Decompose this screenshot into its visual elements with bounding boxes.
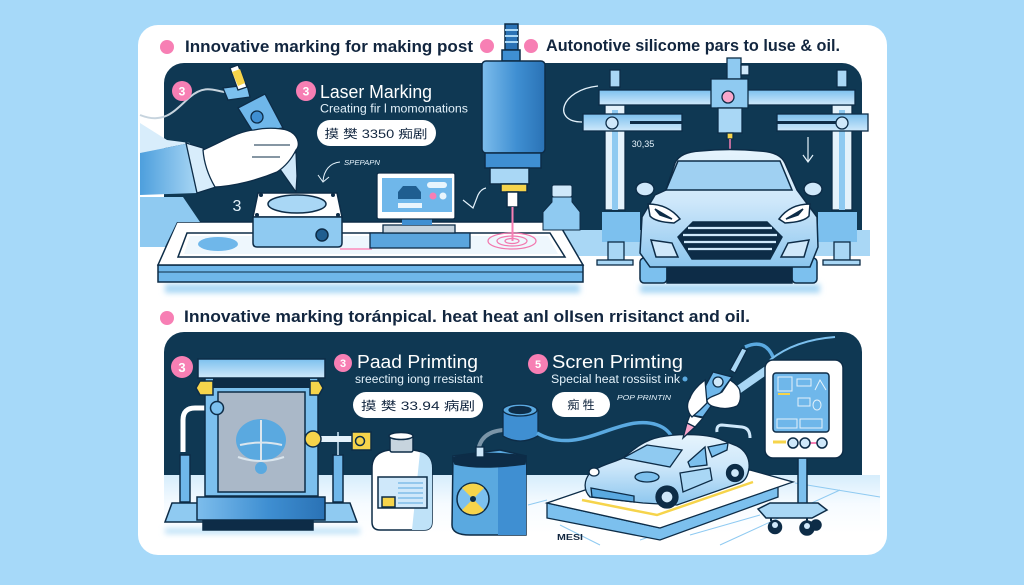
laser head cylinder [482,24,545,241]
callout: laser marking: 3 [303,84,310,98]
step badge: left number: 3 [179,84,186,98]
arrow: check mark [463,188,486,208]
icon: marking gun and gloved hand [140,65,298,247]
floor lines [528,483,880,545]
gantry frame [564,58,868,265]
annotation: SPEPAPN arrow: SPEPAPN [344,158,381,167]
car: front view [636,150,822,293]
callout: laser marking [296,81,468,146]
feet platform [165,503,357,522]
laser beam [512,207,514,241]
hinge [210,402,224,414]
step badge: bottom left: 3 [178,360,186,375]
lab coat [140,197,200,247]
callout: pad printing: Paad Primting [357,352,478,372]
cuff [186,143,216,193]
pipe [183,408,215,452]
grille [678,222,782,259]
heading: line one left: Innovative marking for making post [185,37,473,56]
step badge: left number [172,81,192,101]
nozzle [730,348,747,373]
callout: pad printing: sreecting iong rresistant [355,374,484,386]
top bar [198,359,325,378]
control panel on stand [758,360,843,535]
heading: line two: Innovative marking toránpical. heat heat anl olIsen rrisitanct and oil. [184,307,750,326]
blue pattern on table [198,237,238,251]
posts [610,70,620,87]
callout: laser marking: Laser Marking [320,82,432,102]
floor [164,475,880,533]
base bar [203,520,313,530]
callout: screen printing: 痴 牲 [567,397,595,412]
bases [602,212,640,242]
panel: bottom process band [164,332,880,533]
tube [690,372,732,417]
arrow: down [803,137,813,162]
roof tube [717,425,750,438]
callout: screen printing: Special heat rossiist ink [551,374,680,386]
callout: screen printing [528,352,688,417]
callout: screen printing: Scren Primting [552,352,683,372]
fog lamps [651,240,678,257]
yellow tabs [196,381,213,395]
lower beams [583,114,682,131]
bottle: small fluid [543,185,580,230]
side windows [688,447,707,467]
top beam [599,90,855,105]
white card [138,25,887,555]
pink stripe [340,248,372,250]
annotation: 30,35: 30,35 [632,139,654,149]
rod and yellow clamp [320,436,353,442]
annotation: SPEPAPN arrow [318,158,381,182]
glove [203,128,298,187]
wheels [656,486,678,508]
pink target [488,233,536,249]
footer mark: MESI [557,533,583,542]
windshield [623,445,682,467]
tip [277,152,297,192]
carriage [727,58,741,79]
headlights [648,204,680,223]
ink can with hazard mark [452,450,526,535]
windshield [666,161,792,190]
gun body [238,94,283,132]
callout: screen printing: 5 [535,359,541,371]
panel: top process band [164,63,870,256]
annotation: number 3: 3 [233,198,242,215]
icon: spray gun with gloved hand [683,337,835,438]
heading: line one right: Autonotive silicome pars to luse & oil. [546,36,840,55]
sleeve [140,143,197,195]
platform under sports car [528,470,880,545]
ink bottle [372,432,432,530]
cable [140,89,225,118]
callout: pad printing [334,352,484,418]
screen printing frame [165,359,371,534]
printed logo [236,419,286,474]
nozzle [223,85,250,100]
glove fingers [688,380,707,417]
hoses [745,344,773,357]
computer monitor [370,173,470,248]
callout: laser marking: Creating fir l momomations [320,104,468,116]
step badge: bottom left [171,356,193,378]
silicone sample box [253,193,342,247]
callout: laser marking: 摸 樊 3350 痴剧 [324,126,428,141]
frame [205,378,318,496]
glove palm [707,380,740,408]
hose and feeder cup [476,404,673,457]
callout: pad printing: 3 [340,358,346,370]
cable [564,86,598,122]
workbench table [158,222,583,293]
floor glow under the gantry [560,230,870,256]
callout: screen printing: POP PRINTIN [617,393,672,402]
sports car [585,425,750,508]
cylinders [180,455,190,502]
front grille [591,488,634,502]
callout: pad printing: 摸 樊 33.94 病剧 [361,398,475,413]
